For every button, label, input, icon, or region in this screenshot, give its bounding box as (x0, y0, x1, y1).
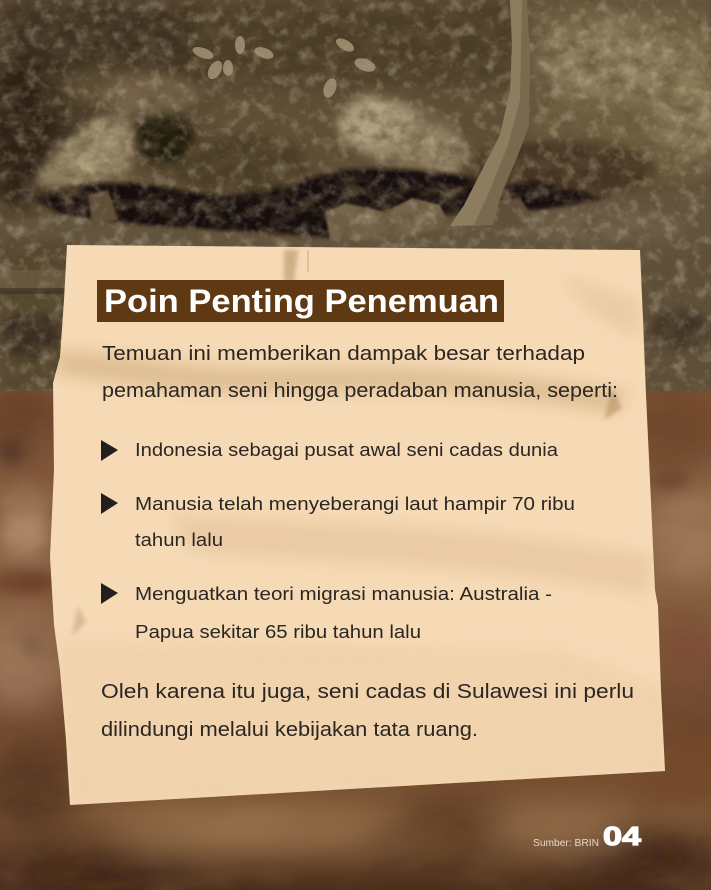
closing text: dilindungi melalui kebijakan tata ruang. (101, 719, 478, 741)
heading: Poin Penting Penemuan: Poin Penting Penemuan (104, 283, 499, 319)
ground rocks (325, 198, 450, 240)
hand prints (0, 436, 709, 674)
source credit: Sumber: BRIN (533, 838, 599, 849)
closing text: Oleh karena itu juga, seni cadas di Sulawesi ini perlu (101, 681, 634, 703)
background: blurred rock art wall (0, 385, 711, 890)
closing text (101, 681, 634, 741)
bullet 1: Indonesia sebagai pusat awal seni cadas dunia (135, 439, 559, 460)
intro text: Temuan ini memberikan dampak besar terhadap (102, 343, 585, 365)
panel: torn paper sheet (50, 245, 670, 810)
cave opening (35, 169, 610, 238)
bullet 2: tahun lalu (135, 529, 223, 550)
intro text (102, 343, 618, 402)
rock face (100, 75, 655, 200)
tree trunk (450, 0, 530, 226)
ground (4, 196, 708, 244)
intro text: pemahaman seni hingga peradaban manusia, seperti: (102, 380, 618, 402)
leaves (191, 36, 377, 99)
page number: 04 (603, 821, 642, 851)
bullet list (101, 439, 575, 642)
foliage masses (0, 0, 711, 210)
bullet 3 (101, 583, 552, 642)
background: cave photograph (0, 0, 711, 391)
texture (0, 0, 711, 391)
bullet 3: Menguatkan teori migrasi manusia: Australia - (135, 583, 552, 604)
bullet 3: Papua sekitar 65 ribu tahun lalu (135, 621, 421, 642)
bullet 2 (101, 493, 575, 550)
bullet 2: Manusia telah menyeberangi laut hampir 70 ribu (135, 493, 575, 514)
